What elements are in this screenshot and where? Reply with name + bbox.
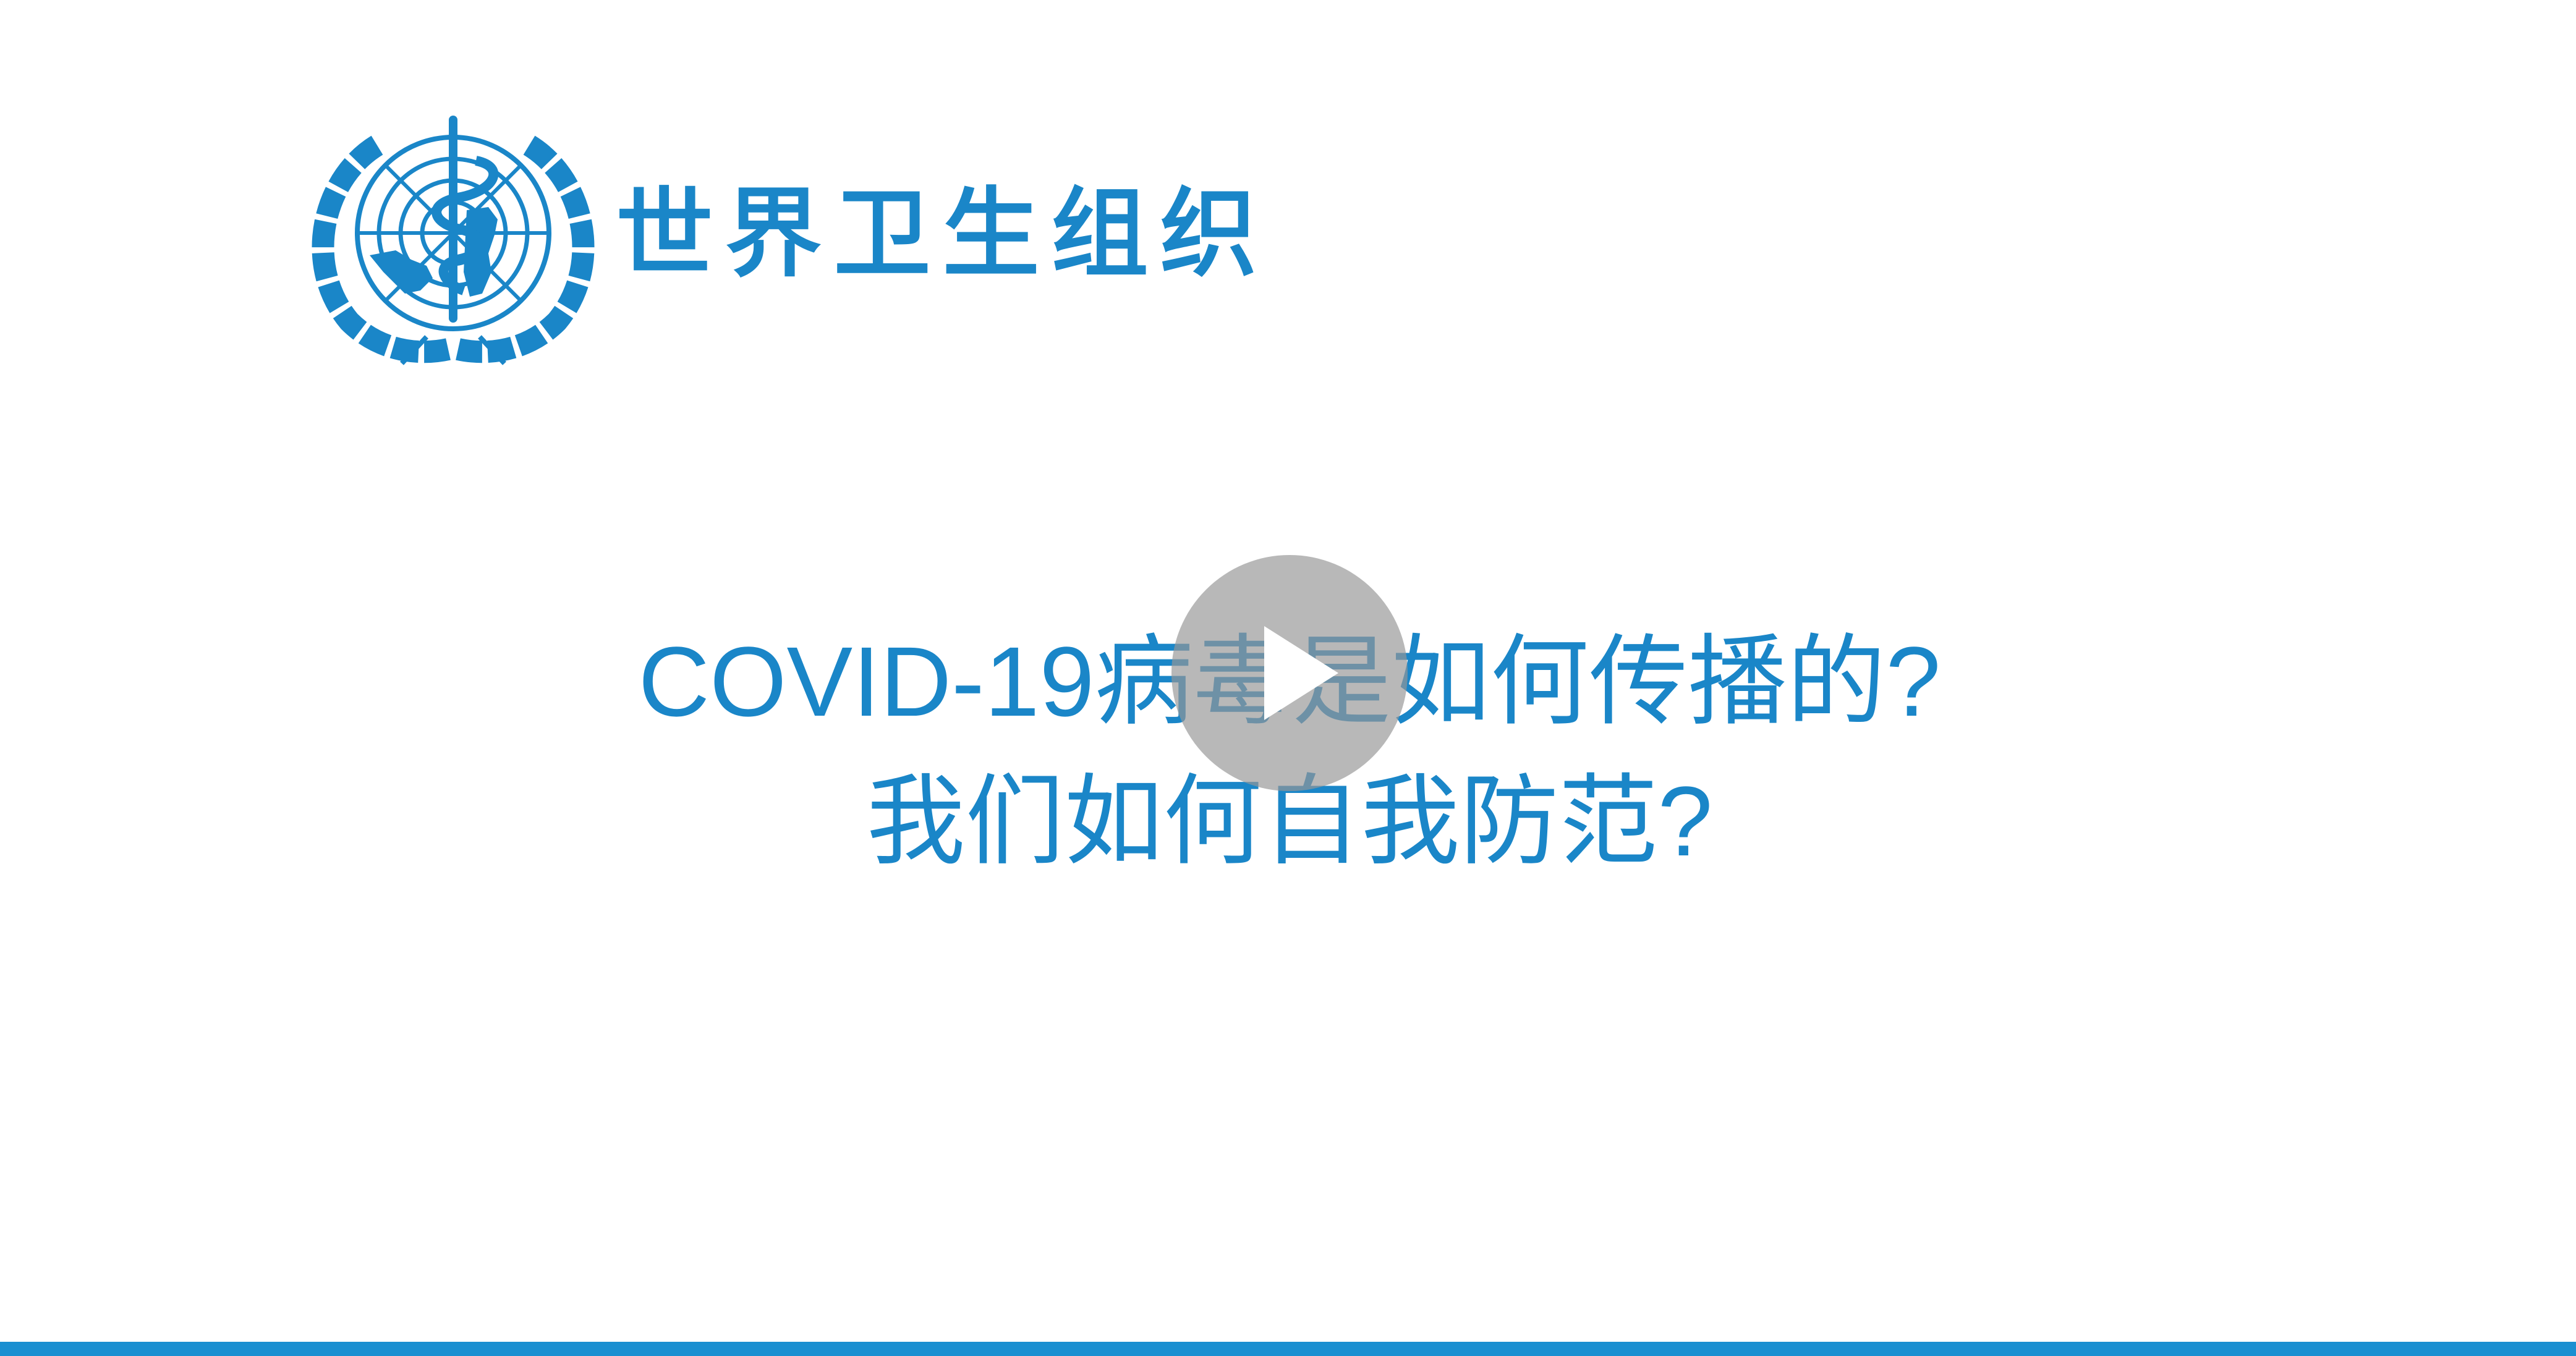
title [639, 626, 1941, 876]
heading: organization name: 世界卫生组织 [616, 180, 1269, 289]
title: 我们如何自我防范? [867, 766, 1712, 876]
title: COVID-19病毒是如何传播的? [639, 626, 1941, 737]
icon: play button [1171, 555, 1408, 791]
icon: WHO logo [312, 116, 595, 365]
bottom bar [0, 1342, 2576, 1356]
